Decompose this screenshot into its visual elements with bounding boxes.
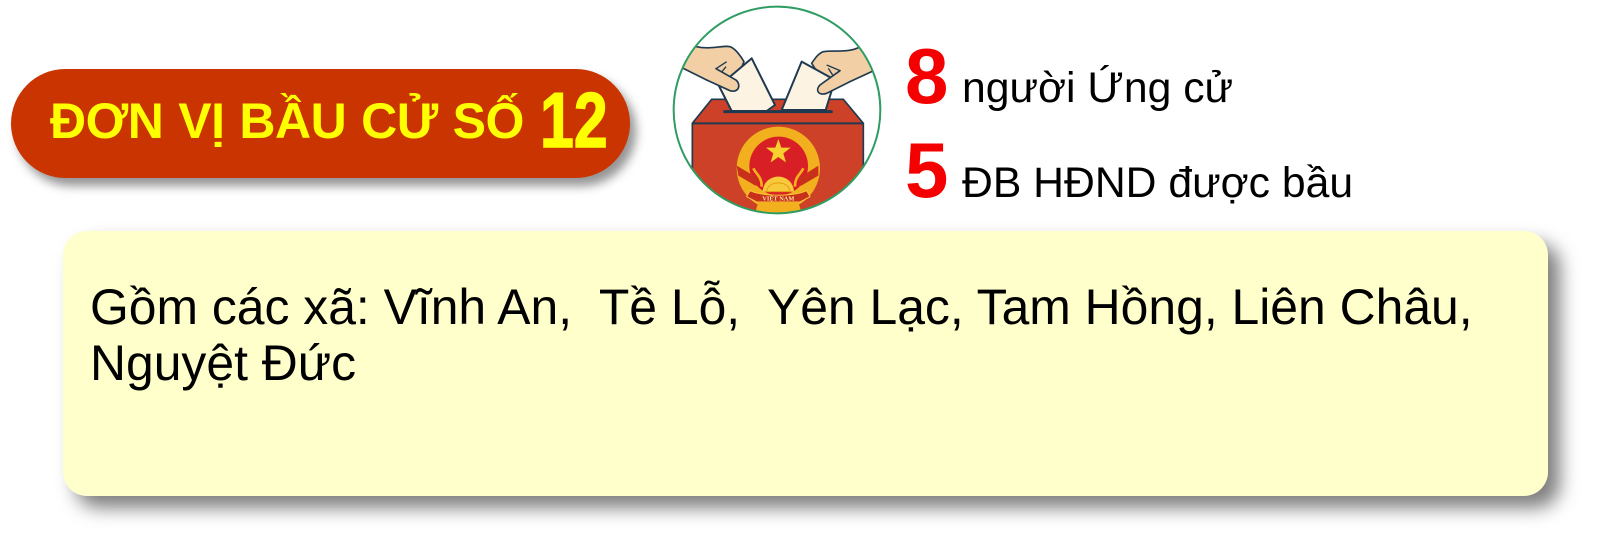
title number: 12 [540, 76, 608, 164]
commune list text: Gồm các xã: Vĩnh An, Tề Lỗ, Yên Lạc, Tam Hồng, Liên Châu, Nguyệt Đức [90, 279, 1473, 391]
stat: candidates number: 8 [905, 32, 948, 120]
icon: ballot box with hands and national emblem: VIỆT NAM [762, 194, 794, 202]
panel: title pill [11, 69, 630, 178]
stat: delegates label: ĐB HĐND được bầu [962, 159, 1353, 207]
icon: ballot box with hands and national emblem [672, 6, 882, 214]
stat: candidates label: người Ứng cử [962, 64, 1233, 112]
stat: delegates number: 5 [905, 126, 948, 214]
title text: ĐƠN VỊ BẦU CỬ SỐ [50, 93, 524, 149]
panel: commune list [63, 231, 1548, 496]
